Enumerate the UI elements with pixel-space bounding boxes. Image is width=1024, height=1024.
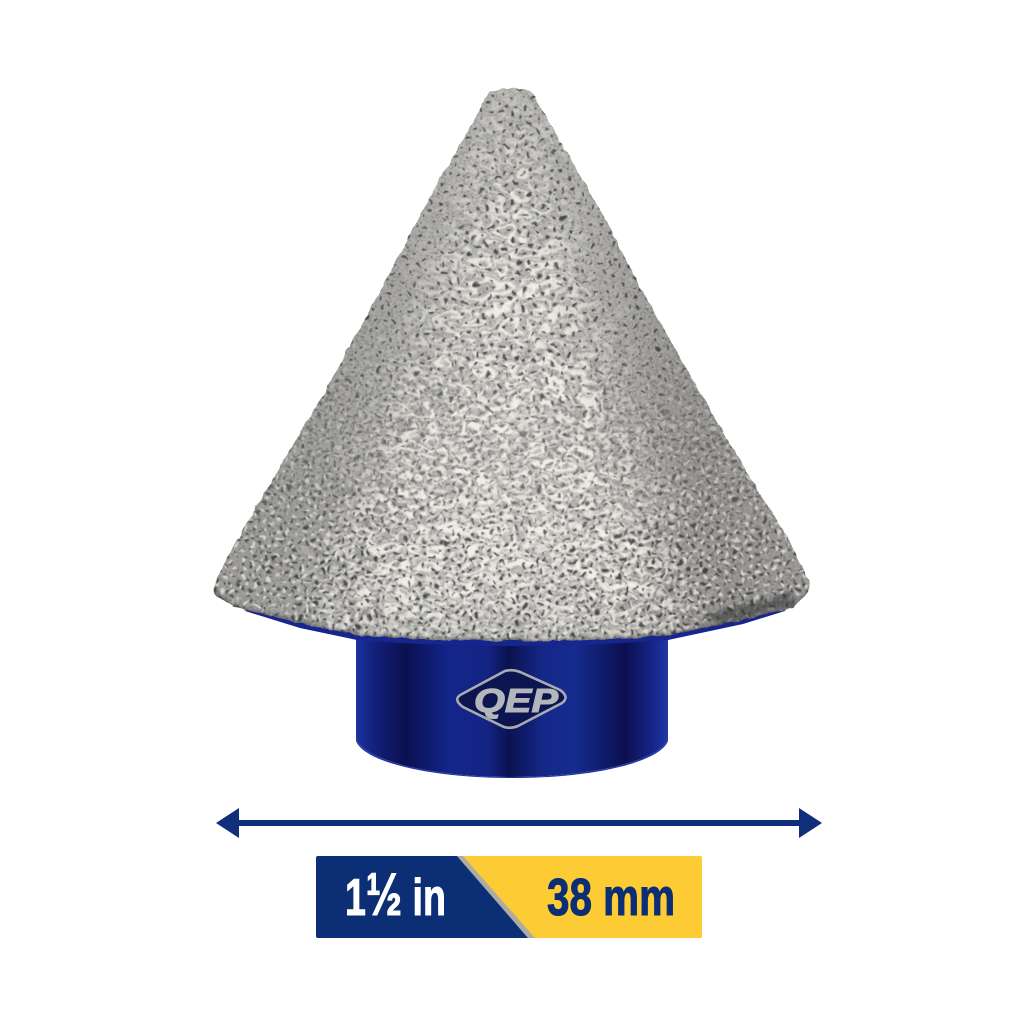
dark patch at right rim (700, 592, 800, 624)
dark gritty rim (214, 590, 812, 646)
diamond-coated cone (200, 80, 830, 650)
white vein texture (284, 88, 719, 642)
blue collar shank (356, 628, 668, 778)
navy imperial panel (316, 856, 528, 938)
metric size text: 38 mm (547, 869, 675, 927)
product infographic (214, 87, 822, 938)
QEP logo badge: QEP (474, 682, 559, 719)
blue underside rim (240, 590, 785, 646)
double-headed dimension arrow (216, 808, 822, 838)
round pits on upper cone (258, 88, 768, 532)
imperial size text: 1½ in (345, 861, 446, 928)
small pits and beads on lower cone (214, 318, 810, 642)
fine grit texture (200, 80, 830, 650)
yellow metric panel (462, 856, 702, 938)
broad lighting (394, 252, 632, 606)
grey divider (457, 856, 535, 938)
QEP logo badge (457, 670, 566, 728)
size label (316, 856, 702, 938)
